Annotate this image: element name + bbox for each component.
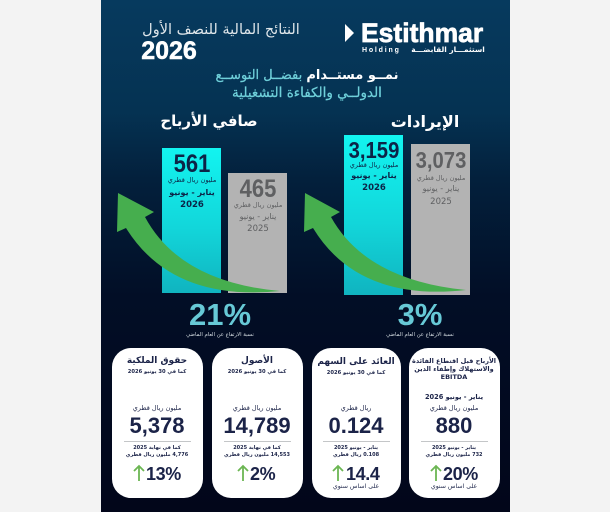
card: assets (212, 348, 303, 498)
logo subtext: Holding (362, 47, 401, 54)
caption: على اساس سنوي (333, 483, 379, 490)
change (133, 464, 181, 484)
period: يناير - يونيو (169, 188, 215, 197)
period: يناير - يونيو (423, 184, 459, 193)
heading: EBITDA (441, 373, 467, 381)
caption: نسبة الارتفاع عن العام الماضي (386, 332, 454, 338)
title: first half results: النتائج المالية للنصف الأول (142, 22, 300, 38)
comparison: 4,776 مليون ريال قطري (126, 452, 188, 458)
period: يناير - يونيو (240, 212, 276, 221)
date: كما في 30 يونيو 2026 (327, 370, 385, 376)
icon: up arrow (133, 464, 145, 481)
icon: up arrow (332, 464, 344, 481)
value: 14,789 (223, 413, 291, 438)
year: 2025 (430, 197, 452, 207)
percent: 20% (443, 464, 478, 484)
percent: 21% (189, 297, 251, 332)
caption: نسبة الارتفاع عن العام الماضي (186, 332, 254, 338)
value: 0.124 (328, 413, 384, 438)
unit: مليون ريال قطري (350, 161, 398, 169)
arrow: profit growth (117, 193, 280, 292)
bar: profit 2025 (228, 173, 287, 293)
value: 3,159 (349, 137, 399, 163)
stat: revenue growth 3% (386, 297, 454, 338)
arrow: revenue growth (304, 193, 466, 292)
comparison (126, 445, 188, 458)
unit: مليون ريال قطري (234, 201, 282, 209)
subtitle line 2: الدولــي والكفاءة التشغيلية (232, 85, 382, 101)
unit: مليون ريال قطري (417, 174, 465, 182)
logo arabic: استثمـــار القابضـــة (411, 45, 485, 54)
heading: revenue: الإيرادات (391, 112, 459, 131)
change (237, 464, 276, 484)
heading: net profit: صافي الأرباح (160, 112, 258, 130)
comparison (425, 445, 483, 458)
percent: 2% (250, 464, 275, 484)
comparison: يناير - يونيو 2025 (432, 445, 476, 451)
bar: revenue 2026 (344, 135, 403, 295)
date: كما في 30 يونيو 2026 (228, 369, 286, 375)
heading (412, 356, 496, 381)
unit: ريال قطري (341, 404, 371, 412)
change value: 14.4 (346, 464, 379, 484)
unit: مليون ريال قطري (430, 404, 478, 412)
logo wordmark: Estithmar (361, 18, 483, 48)
caption: على اساس سنوي (431, 483, 477, 490)
period: يناير - يونيو (351, 171, 397, 180)
heading: العائد على السهم (317, 357, 395, 367)
bar: revenue 2025 (411, 144, 470, 295)
icon: up arrow (237, 464, 249, 481)
logo: Estithmar Holding (345, 18, 484, 54)
heading: والاستهلاك وإطفاء الدين (414, 365, 494, 373)
value: 880 (436, 413, 472, 438)
change (430, 464, 478, 484)
value: 3,073 (416, 147, 466, 173)
logo arrow (345, 24, 354, 42)
card: earnings per share (312, 348, 401, 498)
period: يناير - يونيو 2026 (425, 393, 483, 401)
unit: مليون ريال قطري (233, 404, 281, 412)
value: 561 (174, 150, 210, 178)
comparison: 0.108 ريال قطري (333, 452, 379, 458)
comparison: يناير - يونيو 2025 (334, 445, 378, 451)
card: equity (112, 348, 203, 498)
bar: profit 2026 (162, 148, 221, 293)
subtitle (216, 68, 398, 101)
heading: الأصول (241, 356, 273, 366)
year: 2025 (247, 224, 269, 234)
dark background panel (101, 0, 510, 512)
value: 465 (240, 175, 276, 203)
comparison (224, 445, 290, 458)
comparison: كما في نهاية 2025 (233, 445, 281, 451)
year: 2026 (362, 183, 386, 193)
unit: مليون ريال قطري (133, 404, 181, 412)
comparison: 732 مليون ريال قطري (425, 452, 483, 458)
comparison (333, 445, 379, 458)
year: 2026 (180, 200, 204, 210)
card: EBITDA (409, 348, 500, 498)
date: كما في 30 يونيو 2026 (128, 369, 186, 375)
comparison: 14,553 مليون ريال قطري (224, 452, 290, 458)
percent: 13% (146, 464, 181, 484)
unit: مليون ريال قطري (168, 176, 216, 184)
comparison: كما في نهاية 2025 (133, 445, 181, 451)
value: 5,378 (129, 413, 185, 438)
stat: profit growth 21% (186, 297, 254, 338)
heading: حقوق الملكية (127, 356, 187, 366)
percent: 3% (398, 297, 442, 332)
heading: الأرباح قبل اقتطاع الفائدة (412, 357, 496, 365)
title year: 2026 (141, 37, 197, 65)
subtitle line 1: نمــو مستــدام بفضــل التوســع (216, 68, 398, 83)
change (332, 464, 380, 484)
icon: up arrow (430, 464, 442, 481)
